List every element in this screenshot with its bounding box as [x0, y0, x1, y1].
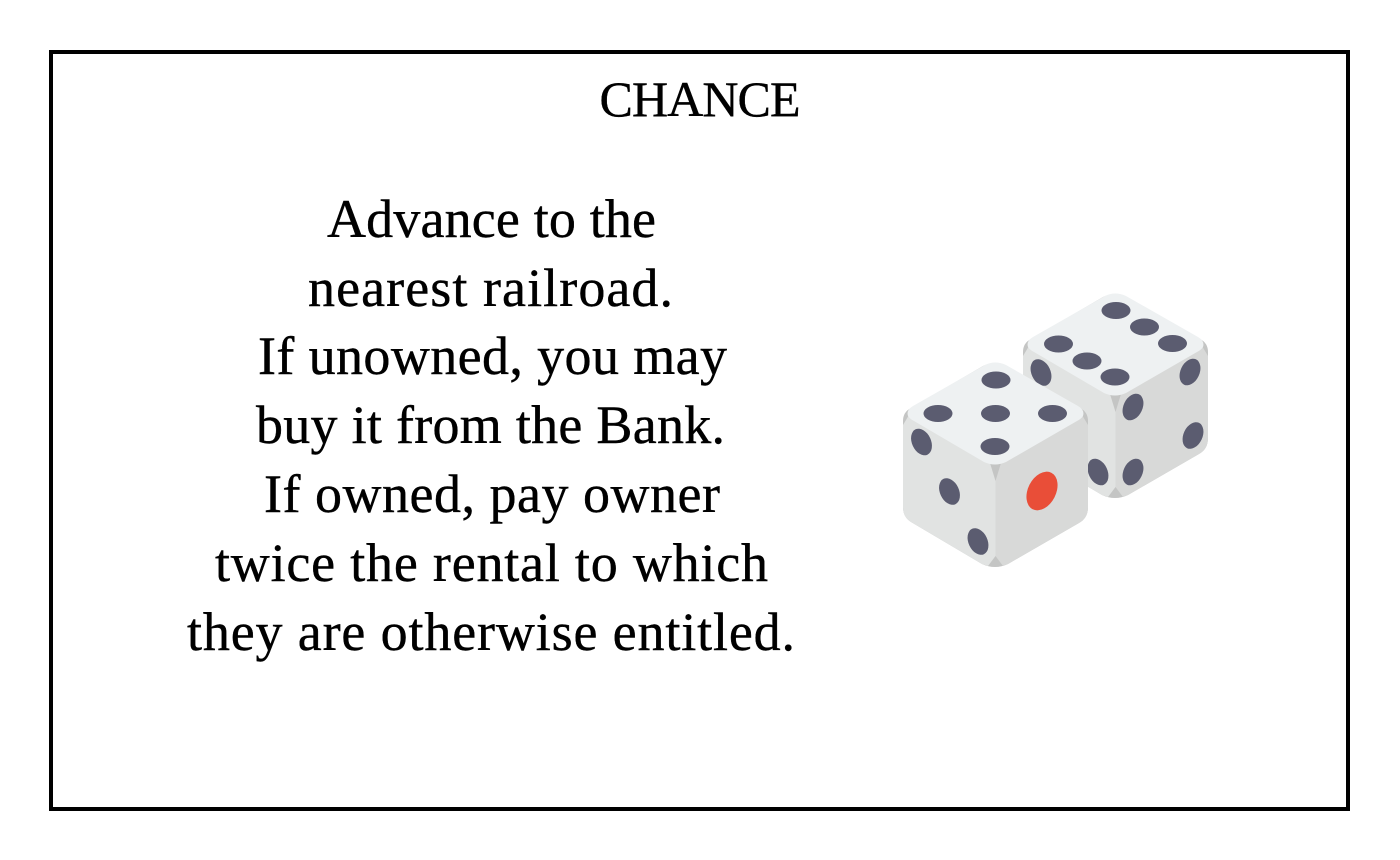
icon: back die	[1023, 294, 1208, 498]
card instruction text: If owned, pay owner	[264, 464, 720, 524]
card instruction text: If unowned, you may	[258, 326, 727, 386]
card instruction text	[187, 189, 795, 662]
card instruction text: they are otherwise entitled.	[187, 602, 795, 662]
card instruction text: twice the rental to which	[215, 533, 768, 593]
card instruction text: buy it from the Bank.	[256, 395, 725, 455]
icon: pair of dice	[903, 294, 1208, 567]
card instruction text: nearest railroad.	[308, 258, 673, 318]
icon: front die	[903, 362, 1088, 567]
title: CHANCE	[600, 71, 800, 127]
icon: red pip	[1020, 466, 1064, 516]
card instruction text: Advance to the	[327, 189, 656, 249]
